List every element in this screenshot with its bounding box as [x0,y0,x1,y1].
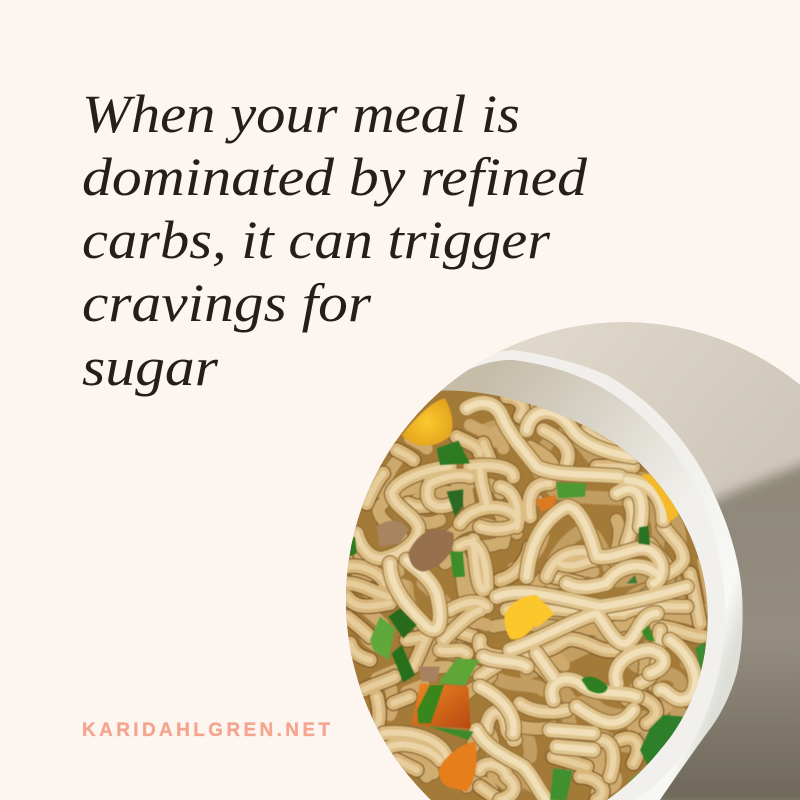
green onion pieces [349,441,707,800]
linen cloth background [470,322,800,800]
headline: dominated by refined [82,147,588,207]
headline: sugar [82,337,219,397]
headline: cravings for [82,273,372,333]
headline: When your meal is [82,84,520,144]
carrot pieces [412,495,557,792]
website credit: KARIDAHLGREN.NET [82,720,330,741]
bowl inner wall [340,360,725,800]
meat pieces [377,521,454,682]
corn kernels [402,398,679,639]
broth and noodles [340,380,717,800]
headline [82,84,588,397]
photo: bowl of ramen noodles in circular crop [340,320,800,800]
white bowl rim [469,350,743,800]
filler noodles [343,385,717,800]
headline: carbs, it can trigger [82,210,551,270]
